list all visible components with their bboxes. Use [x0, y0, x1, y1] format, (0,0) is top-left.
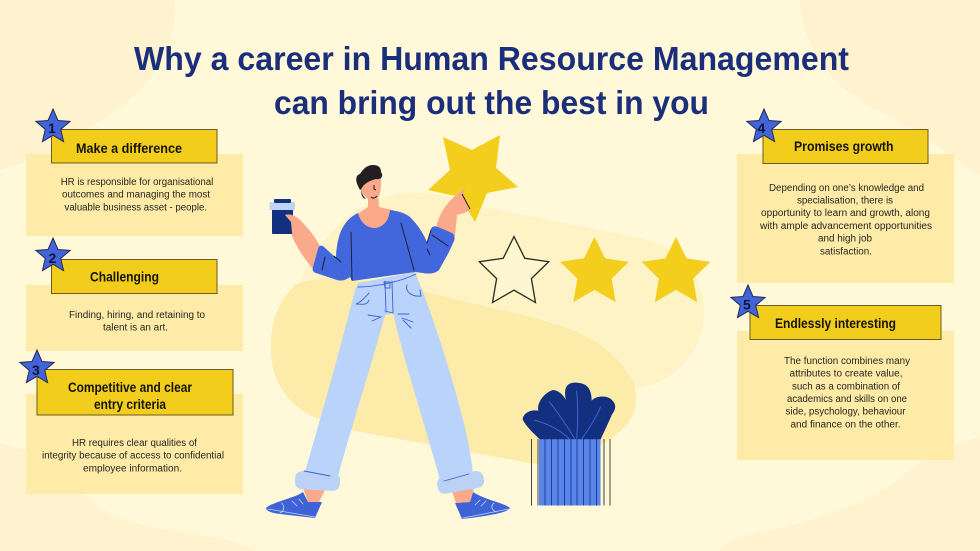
header bar: [37, 370, 233, 415]
title: Why a career in Human Resource Management: [134, 40, 849, 77]
body text: HR requires clear qualities of: [72, 438, 197, 449]
sweater: [313, 210, 455, 281]
body text: The function combines many: [784, 356, 910, 367]
plant leaves: [523, 383, 615, 439]
thumb on star: [462, 194, 470, 209]
body text: Depending on one’s knowledge and: [769, 183, 924, 194]
body text: satisfaction.: [820, 246, 872, 258]
title: can bring out the best in you: [274, 84, 709, 121]
card: [26, 154, 243, 236]
big star held: [428, 135, 518, 222]
shoes: [266, 492, 510, 519]
star badge 4: 4: [758, 120, 766, 136]
heading: Promises growth: [794, 138, 894, 154]
star badge 5: [731, 285, 765, 318]
body text: opportunity to learn and growth, along: [761, 208, 930, 219]
panel: challenging: [26, 238, 243, 351]
star badge 3: [20, 350, 54, 383]
icon: potted plant: [523, 383, 615, 506]
star badge 5: 5: [743, 296, 751, 312]
body text: Finding, hiring, and retaining to: [69, 310, 205, 321]
body text: with ample advancement opportunities: [759, 221, 932, 232]
star badge 1: 1: [48, 120, 56, 136]
heading: Competitive and clear: [68, 379, 192, 395]
header bar: [750, 306, 941, 340]
body text: integrity because of access to confidential: [42, 450, 224, 462]
body text: [69, 310, 205, 334]
heading: Make a difference: [76, 140, 182, 156]
card: [737, 154, 954, 283]
panel: promises growth: [737, 109, 954, 283]
heading: Endlessly interesting: [775, 315, 896, 331]
header bar: [52, 130, 217, 163]
plant pot: [532, 439, 610, 506]
star badge 2: 2: [48, 250, 56, 266]
illustration: background blobs: [271, 193, 704, 464]
illustration: person: [266, 135, 518, 519]
header bar: [52, 260, 217, 294]
body text: such as a combination of: [792, 382, 900, 392]
body text: and high job: [818, 234, 872, 244]
star badge 2: [36, 238, 70, 271]
neck and head: [356, 165, 392, 232]
rating stars: [479, 236, 710, 303]
coffee cup: [270, 199, 301, 237]
jeans detail lines: [304, 274, 469, 481]
header bar: [763, 130, 928, 164]
body text: attributes to create value,: [790, 368, 902, 380]
body text: [784, 356, 910, 430]
card: [26, 285, 243, 351]
jeans: [305, 272, 473, 480]
body text: valuable business asset - people.: [64, 202, 207, 214]
body text: [61, 177, 213, 214]
body text: talent is an art.: [103, 322, 168, 334]
body text: employee information.: [83, 464, 182, 474]
trouser cuffs: [295, 470, 485, 495]
heading: Challenging: [90, 268, 159, 284]
body text: and finance on the other.: [790, 420, 900, 430]
star badge 3: 3: [32, 362, 40, 378]
star badge 4: [747, 109, 781, 142]
filled star 1: [560, 237, 629, 302]
body text: outcomes and managing the most: [62, 190, 210, 200]
panel: make a difference: [26, 109, 243, 236]
card: [26, 394, 243, 494]
heading: [68, 379, 192, 412]
body text: academics and skills on one: [787, 394, 907, 405]
panel: endlessly interesting: [731, 285, 954, 460]
empty star: [479, 236, 549, 303]
title: [134, 40, 849, 121]
right arm skin: [436, 188, 470, 236]
card: [737, 331, 954, 460]
left arm skin: [285, 214, 321, 270]
sweater fold lines: [322, 223, 448, 280]
body text: specialisation, there is: [797, 196, 893, 206]
heading: entry criteria: [94, 396, 166, 412]
panel: competitive and clear entry criteria: [20, 350, 243, 494]
body text: [42, 438, 224, 474]
filled star 2: [642, 237, 710, 302]
star badge 1: [36, 109, 70, 142]
body text: HR is responsible for organisational: [61, 177, 213, 188]
body text: side, psychology, behaviour: [786, 406, 906, 418]
ankles: [303, 488, 474, 503]
body text: [759, 183, 932, 258]
